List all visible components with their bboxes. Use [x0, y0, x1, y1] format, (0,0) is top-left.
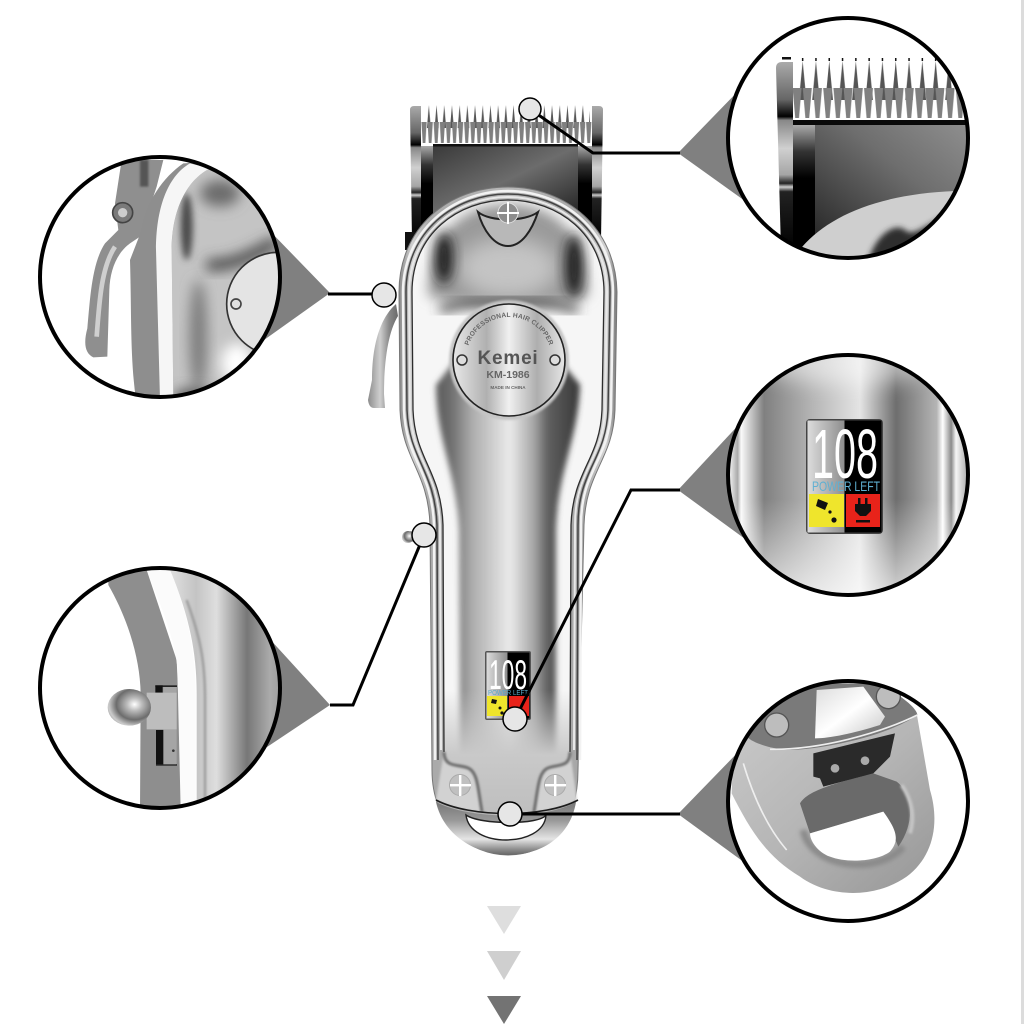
body highlight zoom — [147, 572, 183, 804]
bottom edge line — [436, 800, 578, 814]
lens — [728, 681, 968, 921]
loop body zoom — [732, 713, 934, 893]
body panel — [405, 195, 610, 820]
body edge zoom — [108, 570, 183, 810]
bottom loop hole — [466, 815, 546, 840]
pointer wedge — [255, 636, 330, 755]
anchor dot — [372, 283, 396, 307]
loop opening zoom — [810, 812, 896, 861]
leader line — [330, 535, 424, 705]
blade plate — [433, 146, 578, 216]
medallion rivets — [457, 355, 560, 365]
medallion edge zoom — [226, 252, 278, 350]
side switch knob — [402, 531, 428, 543]
bottom corner contours — [444, 752, 570, 812]
callout: blade detail — [519, 18, 971, 262]
leader line — [522, 812, 680, 816]
callout: charging base detail — [498, 681, 968, 921]
anchor dot — [498, 802, 522, 826]
page edge strip — [1021, 0, 1024, 1024]
rim contour lines — [403, 191, 613, 760]
pointer wedge — [250, 226, 330, 350]
blade guard zoom — [776, 62, 793, 250]
oil indicator — [809, 494, 844, 527]
switch slot zoom — [147, 685, 177, 766]
inner recess zoom — [800, 773, 910, 847]
bottom bowl — [436, 802, 576, 855]
lens — [728, 18, 971, 262]
body rim — [399, 187, 617, 855]
bottom screws — [450, 774, 566, 796]
leader line — [328, 292, 373, 296]
label: POWER LEFT — [812, 478, 880, 494]
lever — [368, 304, 398, 408]
blade side guards — [405, 106, 603, 250]
leader line — [530, 109, 680, 153]
anchor dot — [519, 98, 541, 120]
scroll-down arrows — [487, 906, 521, 1024]
anchor dot — [412, 523, 436, 547]
loop inner shading zoom — [803, 830, 903, 864]
pointer wedge — [678, 745, 752, 868]
body arc zoom — [802, 191, 954, 256]
pointer wedge — [678, 84, 752, 206]
medallion — [448, 299, 570, 420]
lens — [728, 340, 968, 595]
callout: power switch detail — [40, 523, 436, 810]
digits: 108 — [812, 415, 878, 493]
medallion tagline: PROFESSIONAL HAIR CLIPPER — [464, 312, 553, 346]
body LCD display — [485, 651, 531, 720]
display digits: 108 — [489, 651, 527, 698]
lower panel shading — [444, 695, 570, 812]
clipper illustration — [368, 106, 618, 856]
callout: taper lever detail — [40, 157, 396, 408]
lens — [40, 568, 283, 810]
medallion model: KM-1986 — [486, 369, 530, 381]
charge indicator — [846, 494, 880, 527]
top screw notch — [478, 212, 538, 246]
blade assembly — [405, 105, 603, 250]
pointer wedge — [678, 418, 752, 544]
lens — [38, 155, 282, 399]
medallion origin: MADE IN CHINA — [490, 385, 526, 390]
body surface zoom — [172, 170, 276, 394]
body highlight zoom — [156, 163, 210, 400]
zoomed LCD — [806, 415, 883, 534]
blade teeth zoom — [792, 58, 971, 118]
display charge box — [509, 696, 529, 716]
switch knob zoom — [108, 689, 151, 726]
screws zoom — [765, 685, 900, 737]
medallion brand: Kemei — [477, 348, 539, 369]
clipper body — [398, 186, 618, 856]
body surface zoom — [170, 570, 283, 810]
display label: POWER LEFT — [488, 690, 529, 697]
callout: LCD display detail — [503, 340, 968, 731]
handle shading — [436, 360, 580, 760]
display oil box — [487, 696, 507, 716]
blade plate zoom — [815, 125, 966, 234]
lever zoom — [85, 160, 163, 357]
top screw — [497, 202, 519, 224]
anchor dot — [503, 707, 527, 731]
upper shading — [428, 204, 588, 310]
lower body plate — [436, 752, 577, 814]
blade comb teeth — [421, 105, 593, 143]
body edge zoom — [130, 163, 208, 395]
leader line — [515, 490, 680, 719]
charging socket zoom — [813, 733, 895, 787]
top plate zoom — [747, 683, 917, 750]
